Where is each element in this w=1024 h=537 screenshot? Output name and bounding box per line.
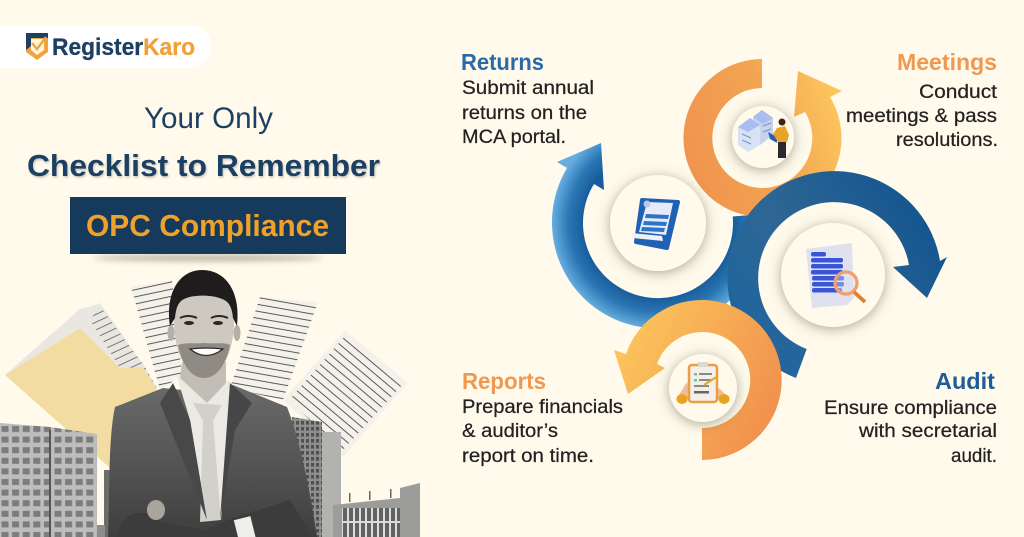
lapels	[160, 383, 207, 520]
crossed arms	[118, 500, 312, 537]
logo pill	[0, 25, 212, 68]
ears	[168, 325, 174, 341]
text block: Meetings: resolutions.	[896, 129, 998, 151]
text block: Returns: MCA portal.	[462, 126, 566, 148]
text block: Meetings: meetings & pass	[846, 105, 997, 127]
text block: Reports	[462, 368, 623, 467]
circle: returns	[610, 175, 706, 271]
illustration: buildings	[0, 417, 420, 537]
left hand	[147, 500, 165, 520]
beard shadow	[178, 343, 230, 378]
icon: reports clipboard and hands	[676, 362, 730, 404]
text block: Audit	[824, 368, 997, 467]
text block: Returns	[461, 49, 594, 148]
server front	[738, 118, 760, 152]
building far right	[333, 483, 420, 537]
text block: Meetings: Meetings	[897, 49, 997, 75]
circle: reports	[669, 354, 737, 422]
arrow: returns	[552, 143, 764, 328]
text block: Meetings: Conduct	[919, 81, 998, 103]
illustration: folder and papers	[5, 280, 408, 468]
text block: Audit: Audit	[935, 368, 995, 394]
text block: Returns: Returns	[461, 49, 544, 75]
paper sheet 3	[283, 330, 408, 457]
paper sheet 1	[131, 280, 182, 390]
heading: Checklist to Remember: Checklist to Remember	[27, 148, 380, 183]
shirt	[177, 377, 230, 520]
icon: returns document	[631, 200, 678, 248]
cycle diagram	[552, 59, 947, 460]
face	[174, 290, 234, 378]
text block: Meetings	[846, 49, 998, 151]
text block: Audit: audit.	[951, 445, 997, 467]
tablet	[768, 132, 777, 143]
text block: Reports: & auditor’s	[462, 420, 558, 442]
folder front	[5, 328, 158, 468]
suit	[108, 385, 317, 537]
icon: audit document and magnifier	[806, 243, 865, 308]
person	[773, 126, 789, 142]
text block: Audit: with secretarial	[858, 420, 997, 442]
logo wordmark: RegisterKaro	[52, 34, 195, 61]
hair	[169, 270, 238, 326]
shirt cuff	[234, 516, 256, 537]
heading: Your Only: Your Only	[144, 102, 273, 135]
arrow: reports	[614, 300, 782, 460]
paper sheet 2	[230, 297, 318, 400]
eyes	[184, 321, 194, 325]
eyebrows	[180, 316, 228, 318]
arrow: audit	[727, 171, 947, 378]
text block: Returns: returns on the	[462, 102, 587, 124]
text block: Reports: Reports	[462, 368, 546, 394]
building right tower	[292, 417, 341, 537]
tie	[193, 403, 222, 522]
text block: Returns: Submit annual	[462, 77, 594, 99]
text block: Audit: Ensure compliance	[824, 397, 997, 419]
circle: audit	[781, 223, 885, 327]
text block: Reports: report on time.	[462, 445, 594, 467]
circle: meetings	[732, 106, 794, 168]
icon: logo shield	[26, 33, 48, 60]
text block: Reports: Prepare financials	[462, 396, 623, 418]
smile	[190, 348, 223, 356]
arrow: meetings	[683, 59, 842, 217]
illustration: smiling businessman	[108, 270, 317, 537]
neck	[180, 362, 226, 403]
server rear	[753, 110, 773, 145]
folder back pages	[5, 303, 157, 388]
banner shadow	[93, 254, 323, 262]
banner: OPC Compliance: OPC Compliance	[86, 208, 329, 243]
banner: OPC Compliance	[70, 197, 346, 254]
building left	[0, 423, 97, 537]
icon: meetings server and person	[738, 110, 789, 158]
